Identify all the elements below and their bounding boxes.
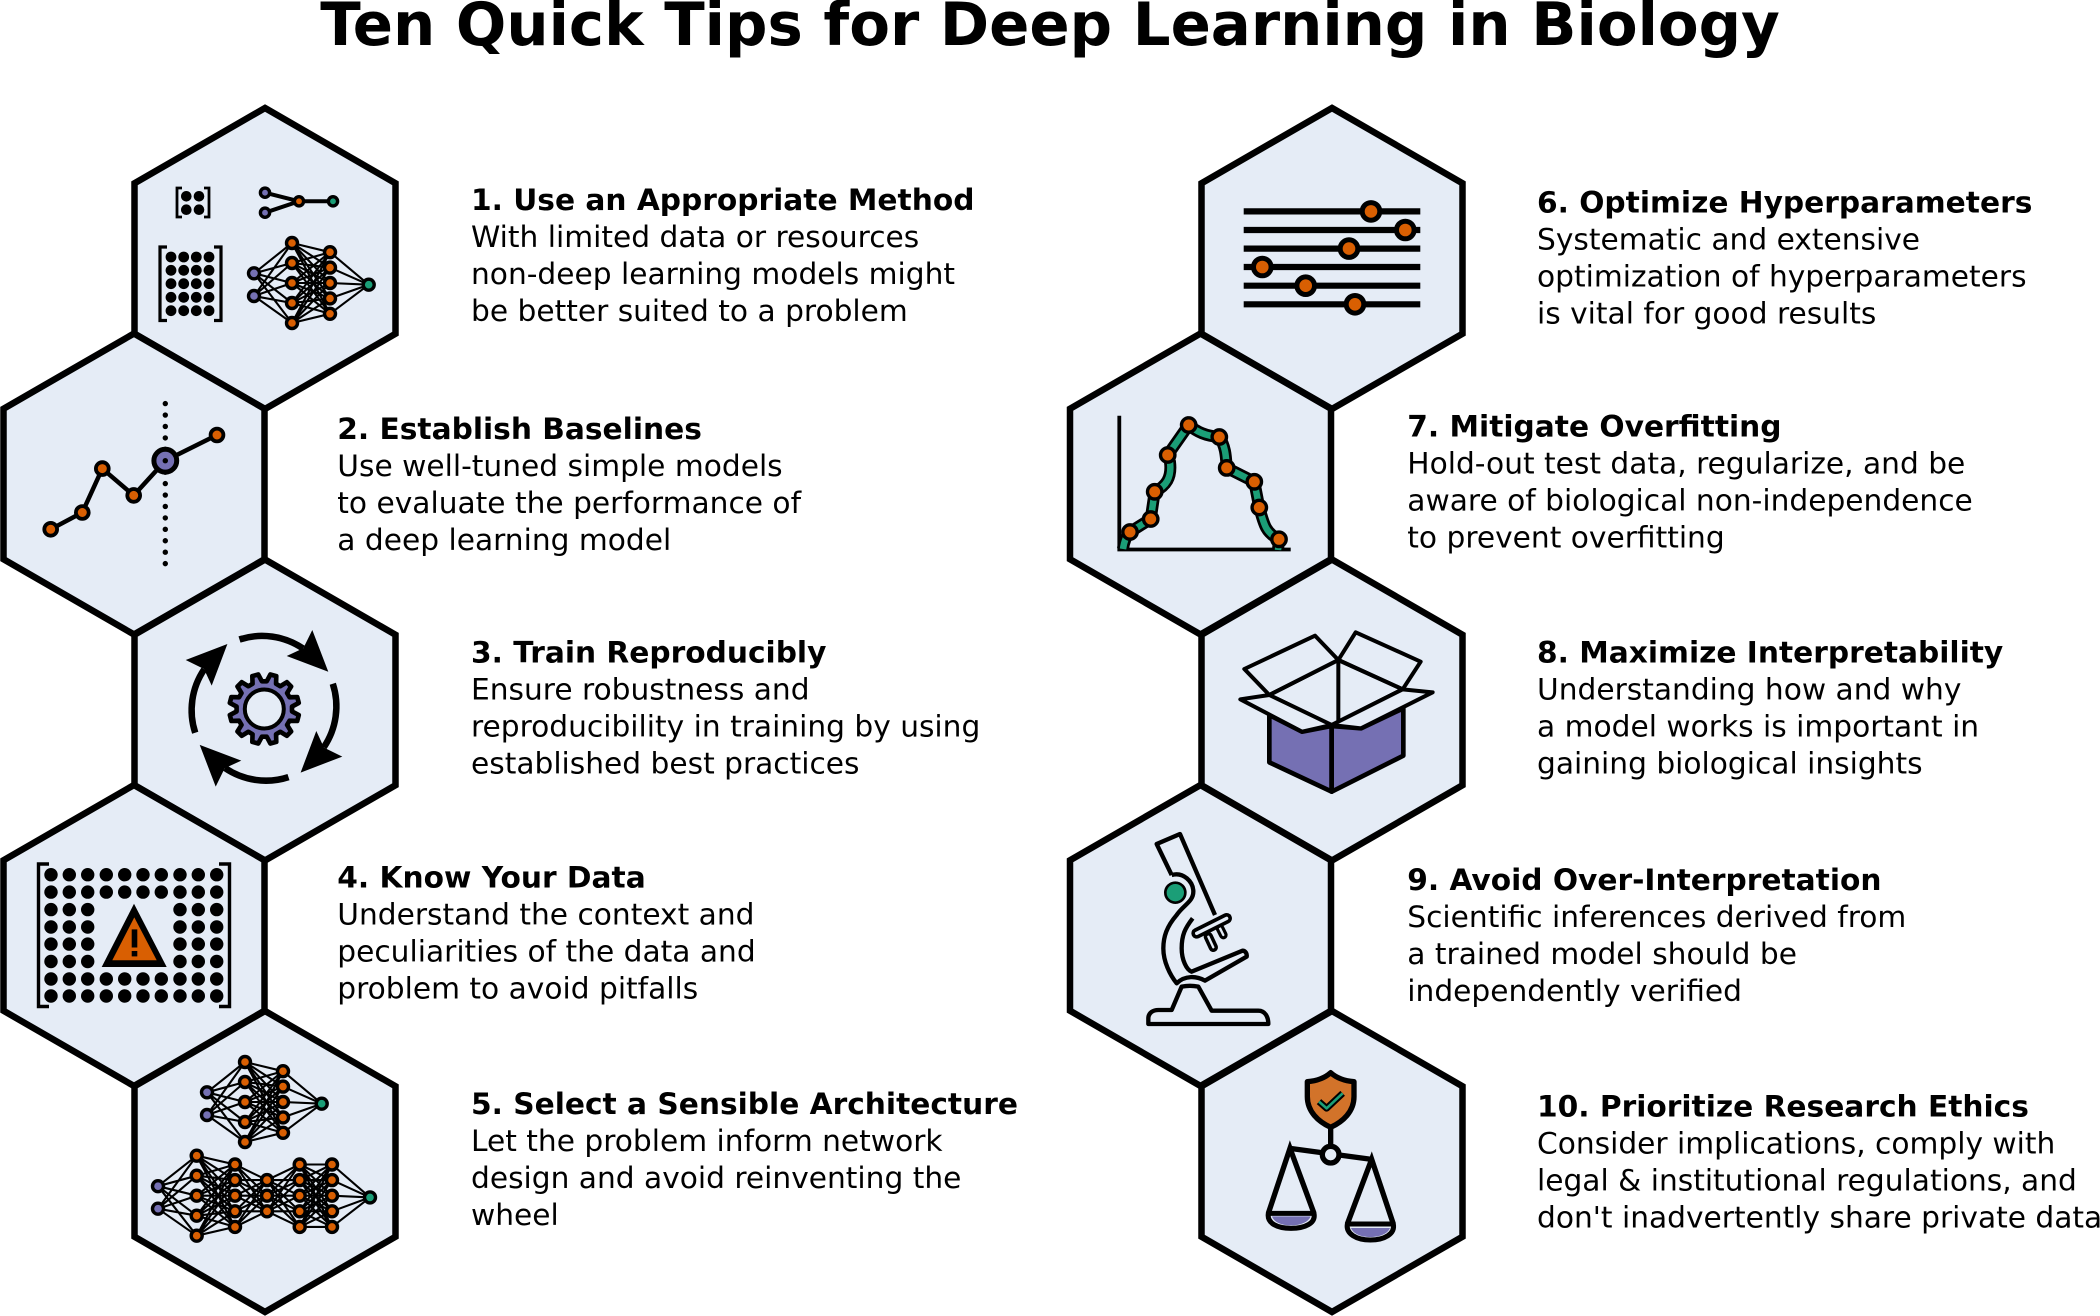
icon: microscope: [1148, 834, 1268, 1024]
text: tip 4: peculiarities of the data and: [337, 934, 756, 968]
text: tip 9: 9. Avoid Over-Interpretation: [1407, 862, 1881, 897]
text: tip 6: 6. Optimize Hyperparameters: [1537, 185, 2032, 220]
text: tip 2: Use well-tuned simple models: [337, 448, 783, 483]
panel: tip 9 avoid over-interpretation: [1070, 785, 1906, 1086]
icon: small network: [260, 188, 338, 217]
icon: large architecture network: [152, 1150, 376, 1241]
panel: tip 2 establish baselines: [4, 334, 802, 634]
panel: tip 10 prioritize research ethics: [1202, 1011, 2100, 1312]
text: tip 7: aware of biological non-independence: [1407, 482, 1973, 518]
hexagon 5: [134, 1011, 396, 1312]
text: tip 2: a deep learning model: [337, 522, 671, 557]
text: tip 8: Understanding how and why: [1537, 672, 1961, 706]
icon: overfitting curve: [1119, 416, 1291, 550]
icon: circular arrows: [186, 630, 342, 787]
text: tip 5: Let the problem inform network: [471, 1123, 943, 1158]
text: tip 6: optimization of hyperparameters: [1537, 259, 2027, 294]
hexagon 7: [1070, 334, 1331, 634]
panel: tip 6 optimize hyperparameters: [1202, 108, 2032, 409]
hexagon 6: [1202, 108, 1462, 409]
text: tip 9: independently verified: [1407, 973, 1742, 1008]
text: tip 5: wheel: [471, 1197, 559, 1232]
icon: open box: [1240, 632, 1433, 792]
text: tip 3: established best practices: [471, 746, 860, 780]
text: tip 3: 3. Train Reproducibly: [471, 634, 826, 670]
text: tip 1: 1. Use an Appropriate Method: [471, 182, 974, 217]
text: tip 8: 8. Maximize Interpretability: [1537, 634, 2003, 670]
text: tip 9: a trained model should be: [1407, 936, 1797, 971]
text: tip 10: Consider implications, comply with: [1537, 1126, 2055, 1160]
icon: small data matrix: [177, 188, 209, 217]
panel: tip 8 maximize interpretability: [1202, 560, 2003, 860]
text: tip 2: to evaluate the performance of: [337, 485, 802, 520]
icon: baseline line chart: [44, 404, 223, 564]
text: tip 5: design and avoid reinventing the: [471, 1160, 961, 1195]
icon: small architecture network: [202, 1056, 327, 1148]
text: tip 8: a model works is important in: [1537, 708, 1979, 744]
text: tip 7: to prevent overfitting: [1407, 520, 1725, 554]
text: tip 3: Ensure robustness and: [471, 672, 810, 706]
text: tip 9: Scientific inferences derived from: [1407, 899, 1906, 934]
panel: tip 4 know your data: [4, 785, 756, 1086]
text: tip 6: is vital for good results: [1537, 296, 1876, 331]
text: tip 10: 10. Prioritize Research Ethics: [1537, 1088, 2029, 1124]
icon: shield and scales: [1268, 1073, 1394, 1240]
hexagon 1: [134, 108, 396, 409]
text: tip 1: non-deep learning models might: [471, 256, 955, 291]
icon: large data matrix: [160, 247, 221, 320]
icon: large network: [248, 238, 374, 328]
panel: tip 7 mitigate overfitting: [1070, 334, 1973, 634]
text: tip 10: don't inadvertently share private data: [1537, 1200, 2100, 1234]
text: tip 2: 2. Establish Baselines: [337, 411, 702, 446]
icon: warning triangle: [102, 904, 167, 967]
icon: data matrix with missing centre: [38, 864, 230, 1006]
panel: tip 5 select a sensible architecture: [134, 1011, 1018, 1312]
text: tip 8: gaining biological insights: [1537, 746, 1923, 780]
text: tip 4: 4. Know Your Data: [337, 860, 646, 894]
hexagon 10: [1202, 1011, 1462, 1312]
text: tip 4: Understand the context and: [337, 896, 754, 932]
text: tip 10: legal & institutional regulations, and: [1537, 1162, 2077, 1198]
text: tip 7: 7. Mitigate Overfitting: [1407, 408, 1782, 444]
hexagon 2: [4, 334, 264, 634]
hexagon 3: [134, 560, 396, 860]
icon: sliders: [1244, 203, 1420, 313]
text: tip 5: 5. Select a Sensible Architecture: [471, 1086, 1018, 1121]
panel: tip 3 train reproducibly: [134, 560, 980, 860]
hexagon 4: [4, 785, 264, 1086]
text: tip 1: be better suited to a problem: [471, 293, 908, 328]
text: tip 6: Systematic and extensive: [1537, 222, 1920, 257]
text: tip 1: With limited data or resources: [471, 219, 919, 254]
icon: gear: [230, 675, 299, 743]
hexagon 8: [1202, 560, 1462, 860]
panel: tip 1 use an appropriate method: [134, 108, 974, 409]
text: tip 4: problem to avoid pitfalls: [337, 970, 698, 1006]
text: tip 7: Hold-out test data, regularize, and be: [1407, 446, 1965, 480]
hexagon 9: [1070, 785, 1331, 1086]
text: tip 3: reproducibility in training by using: [471, 708, 980, 744]
